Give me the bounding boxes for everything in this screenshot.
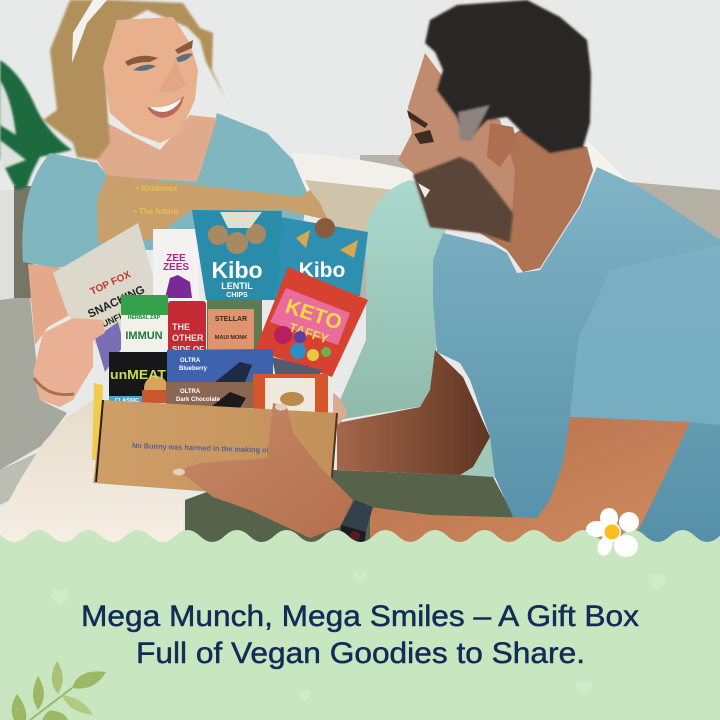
photo: background wall and sofa [0,0,720,545]
box lid [97,175,328,243]
product: Top Fox seeds bag: SUNFLOWER [95,298,152,332]
product: Top Fox seeds bag [53,223,158,372]
smart watch [340,500,373,542]
eye and brow [407,110,434,144]
neck and chest [97,115,217,182]
product: unMEAT: CLASSIC [115,398,139,404]
product: Zee Zees: ZEES [163,262,189,273]
grey sideburn [458,105,490,140]
product: Kibo lentil chips [192,210,282,300]
arm [28,264,75,345]
product: Oltra Dark Chocolate bar: OLTRA [180,389,201,395]
trousers [185,470,515,542]
product: Zee Zees: ZEE [166,253,186,264]
product: The Other Side can [168,301,206,354]
woman [0,0,307,542]
plant [0,60,72,298]
product: Top Fox seeds bag: TOP FOX [89,269,133,298]
product: Zee Zees [153,229,199,301]
gift box front [93,400,338,492]
product: Keto Taffy [255,267,368,378]
man [185,0,720,545]
product: Stellar pretzels: MAUI MONK [215,335,247,341]
face [103,17,198,143]
box slogan: No Bunny was harmed in the making of this [132,441,284,455]
trousers [0,400,183,542]
lid text: • Kindness [136,184,178,193]
beard [413,157,513,243]
product: Oltra Blueberry bar: Blueberry [179,366,208,372]
headband [72,0,107,63]
product: Kibo lentil chips: LENTIL [221,281,253,291]
product: Blake's crispy treat [253,374,328,414]
hair [43,0,226,160]
product: The Other Side can: OTHER [172,333,204,343]
near arm [370,417,690,545]
product: Keto Taffy: TAFFY [287,320,331,347]
green caption panel with scalloped edge [0,530,720,720]
eyes, brows, nose and smile [125,40,193,118]
mouth [418,183,430,198]
man's hand and thumb [173,403,353,538]
neck [480,130,593,272]
ear [487,123,517,167]
far arm [337,350,490,475]
woman's hand [33,318,105,407]
product: Stellar pretzels [207,299,262,353]
product: Stellar pretzels: STELLAR [215,316,247,323]
product: The Other Side can: THE [172,322,190,332]
leaf sprig [12,661,106,720]
product: unMEAT: unMEAT [110,367,166,382]
box lid: • The future [134,207,179,216]
product: Immune tea [121,295,168,352]
hair [425,0,591,153]
product: Kibo lentil chips: CHIPS [226,292,248,299]
shirt [22,113,307,268]
product: Oltra Blueberry bar: OLTRA [180,358,201,364]
product: Oltra Dark Chocolate bar [166,382,254,408]
faint hearts [51,572,666,701]
woman's far hand behind box [333,393,347,425]
yellow box lining [92,383,103,460]
product: Kibo lentil chips: Kibo [211,257,263,283]
headline [81,600,639,670]
headline: Mega Munch, Mega Smiles – A Gift Box [81,600,639,633]
product: Oltra Blueberry bar [167,349,273,385]
flower [586,508,639,558]
sleeve [570,245,720,425]
product: Keto Taffy: KETO [282,295,345,335]
product: Kibo second bag [276,217,368,300]
product: Kibo second bag: Kibo [299,259,345,282]
face [398,53,515,245]
product: Immune tea: IMMUN [125,330,163,342]
product: Top Fox seeds bag: SNACKING [86,284,147,321]
product: Oltra Dark Chocolate bar: Dark Chocolate [176,397,221,403]
torso shirt [433,167,720,542]
product: Immune tea: HERBAL ZAP [128,315,161,321]
product: The Other Side can: SIDE OF [172,345,204,354]
headline: Full of Vegan Goodies to Share. [136,637,585,670]
product: unMEAT [109,352,168,404]
